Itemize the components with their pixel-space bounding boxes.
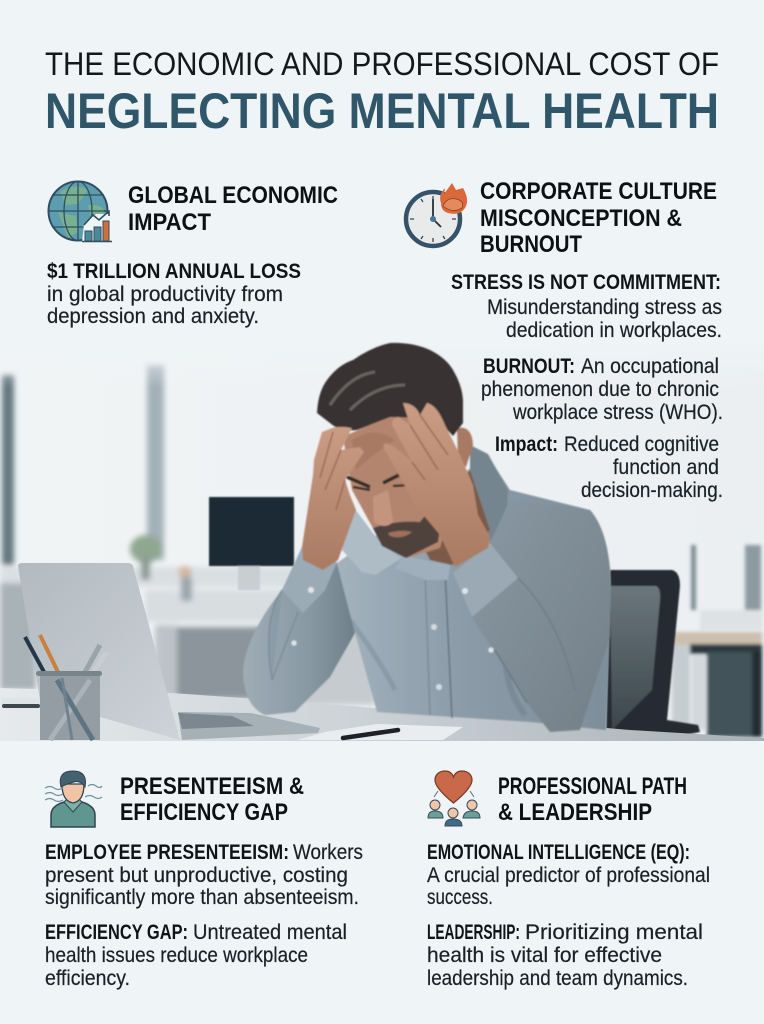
text block: efficiency gap: EFFICIENCY GAP: — [45, 921, 188, 944]
face — [343, 415, 462, 558]
left arm — [243, 547, 355, 715]
text block: employee presenteeism: present but unproductive, costing — [45, 864, 348, 887]
text block: emotional intelligence: success. — [427, 886, 493, 909]
heading — [480, 178, 717, 258]
photo: stressed man at office desk — [0, 338, 764, 741]
shirt placket and folds — [350, 570, 525, 718]
heading — [498, 773, 687, 826]
laptop — [18, 563, 320, 740]
heading: CORPORATE CULTURE — [480, 178, 717, 205]
heading: & LEADERSHIP — [498, 799, 652, 826]
text block: impact: Impact: — [495, 433, 558, 456]
text block: stress is not commitment: STRESS IS NOT COMMITMENT: — [451, 271, 721, 294]
blurred office background — [0, 338, 764, 737]
panel: professional path and leadership — [427, 771, 710, 990]
text block: burnout: An occupational — [581, 355, 719, 378]
background monitor — [209, 497, 294, 590]
text block: emotional intelligence: A crucial predictor of professional — [427, 864, 710, 887]
heading: PROFESSIONAL PATH — [498, 773, 687, 800]
text block: impact: decision-making. — [581, 479, 723, 502]
collar left — [342, 505, 402, 575]
text block: emotional intelligence: EMOTIONAL INTELLIGENCE (EQ): — [427, 841, 690, 864]
heading: IMPACT — [128, 209, 211, 236]
text block: employee presenteeism: EMPLOYEE PRESENTEEISM: — [45, 841, 289, 864]
office chair — [606, 570, 700, 735]
text block: efficiency gap: Untreated mental — [193, 921, 347, 944]
icon: clock with burning brain — [406, 183, 467, 246]
text block: emotional intelligence — [427, 841, 710, 909]
text block: efficiency gap: efficiency. — [45, 967, 130, 990]
collar right — [470, 445, 508, 548]
hair — [317, 343, 463, 436]
heading: BURNOUT — [480, 231, 582, 258]
heading: GLOBAL ECONOMIC — [128, 182, 338, 209]
text block: stress is not commitment: Misunderstanding stress as — [487, 296, 722, 319]
text block: leadership: leadership and team dynamics. — [427, 967, 688, 990]
heading: MISCONCEPTION & — [480, 205, 682, 232]
phone on desk — [2, 698, 40, 708]
text block: employee presenteeism: significantly more than absenteeism. — [45, 886, 359, 909]
beard — [373, 490, 445, 558]
icon: heart over team — [428, 771, 480, 826]
text block: leadership: Prioritizing mental — [525, 921, 703, 944]
man — [243, 343, 611, 732]
text block: burnout: BURNOUT: — [483, 355, 575, 378]
panel: presenteeism and efficiency gap — [45, 771, 363, 990]
paper and pen — [297, 724, 463, 740]
heading — [120, 773, 304, 826]
text block: burnout — [481, 355, 723, 424]
top fade — [0, 338, 764, 388]
text block: efficiency gap: health issues reduce workplace — [45, 944, 308, 967]
text block — [47, 260, 301, 328]
text block: impact: function and — [613, 456, 719, 479]
panel: corporate culture misconception and burnout — [406, 178, 723, 502]
text block: burnout: workplace stress (WHO). — [512, 401, 723, 424]
text block: stress is not commitment: dedication in workplaces. — [506, 319, 722, 342]
torso — [337, 456, 611, 730]
text block: in global productivity from — [47, 283, 283, 306]
text block: leadership — [427, 921, 703, 990]
text block: impact — [495, 433, 723, 502]
pen cup with pencils — [25, 635, 107, 740]
text block: efficiency gap — [45, 921, 347, 990]
left hand — [302, 427, 364, 570]
text block: leadership: LEADERSHIP: — [427, 921, 520, 944]
text block: burnout: phenomenon due to chronic — [481, 378, 719, 401]
heading: PRESENTEEISM & — [120, 773, 304, 800]
heading: EFFICIENCY GAP — [120, 799, 288, 826]
title: THE ECONOMIC AND PROFESSIONAL COST OF — [45, 46, 719, 82]
text block: $1 TRILLION ANNUAL LOSS — [47, 260, 301, 283]
text block: depression and anxiety. — [47, 305, 259, 328]
brows and eyes — [347, 473, 403, 487]
icon: globe with chart — [48, 182, 112, 242]
text block: employee presenteeism: Workers — [293, 841, 363, 864]
right arm — [472, 500, 611, 732]
heading — [128, 182, 338, 236]
right hand — [383, 403, 490, 567]
text block: employee presenteeism — [45, 841, 363, 909]
text block: impact: Reduced cognitive — [564, 433, 719, 456]
neck and ear — [420, 470, 490, 565]
text block: leadership: health is vital for effective — [427, 944, 662, 967]
icon: worker with stress waves — [45, 771, 102, 827]
text block: stress is not commitment — [451, 271, 722, 342]
panel: global economic impact — [47, 182, 338, 328]
main desk — [0, 688, 764, 741]
title — [45, 46, 719, 139]
